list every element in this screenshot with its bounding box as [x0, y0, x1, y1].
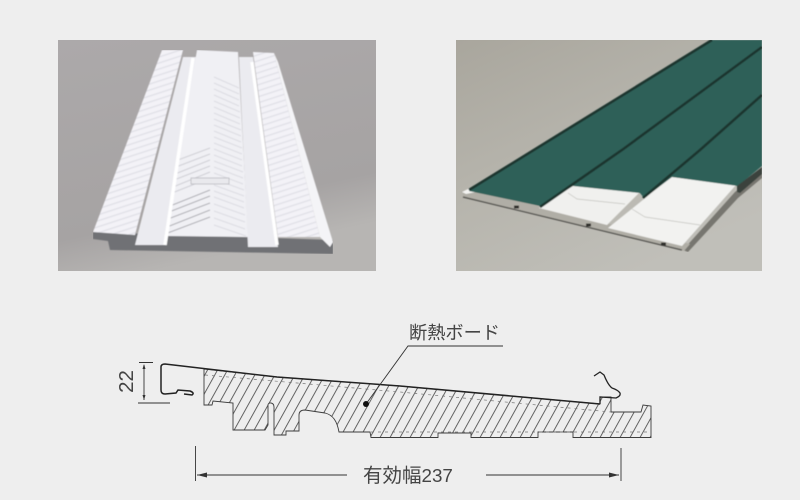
- board end holes: [514, 207, 666, 244]
- centre chevron slots: [165, 190, 210, 234]
- infographic canvas: [58, 40, 762, 484]
- dashed inner line: [205, 375, 650, 432]
- rib highlight: [165, 58, 277, 245]
- seams: [469, 40, 762, 207]
- left groove and rib: [135, 57, 197, 245]
- centre right slots: [214, 77, 246, 236]
- metal clip: [594, 372, 620, 404]
- right edge: [274, 53, 333, 247]
- callout: insulation board: 断熱ボード: [409, 323, 500, 343]
- centre panel: [165, 50, 248, 237]
- panel right edge: [737, 167, 762, 193]
- left flank: [93, 50, 183, 235]
- insulation board right: [608, 177, 736, 246]
- board front edge: [463, 189, 690, 251]
- green roof surface: [469, 40, 762, 206]
- dimension: effective width 237: [196, 446, 621, 487]
- callout: insulation board: [363, 323, 503, 407]
- embossed mark: [191, 178, 229, 184]
- insulation board hatching: [204, 369, 651, 438]
- photo: green metal panels over insulation: [456, 40, 762, 271]
- dimension: height 22: [115, 362, 170, 403]
- board grooves: [568, 193, 700, 225]
- right rib: [239, 57, 278, 247]
- insulation board left: [539, 184, 640, 225]
- dimension: effective width 237: 有効幅237: [363, 465, 453, 487]
- right flank: [253, 52, 320, 237]
- cross-section drawing: [161, 364, 651, 438]
- dimension: height 22: 22: [115, 370, 138, 393]
- cast shadow at right: [683, 170, 762, 252]
- metal skin: [161, 364, 600, 404]
- upper chevron slots: [172, 148, 210, 193]
- photo: white insulation board: [58, 40, 376, 271]
- board left tip: [462, 188, 476, 194]
- board side shadow: [93, 232, 333, 254]
- board bottom line: [463, 197, 682, 250]
